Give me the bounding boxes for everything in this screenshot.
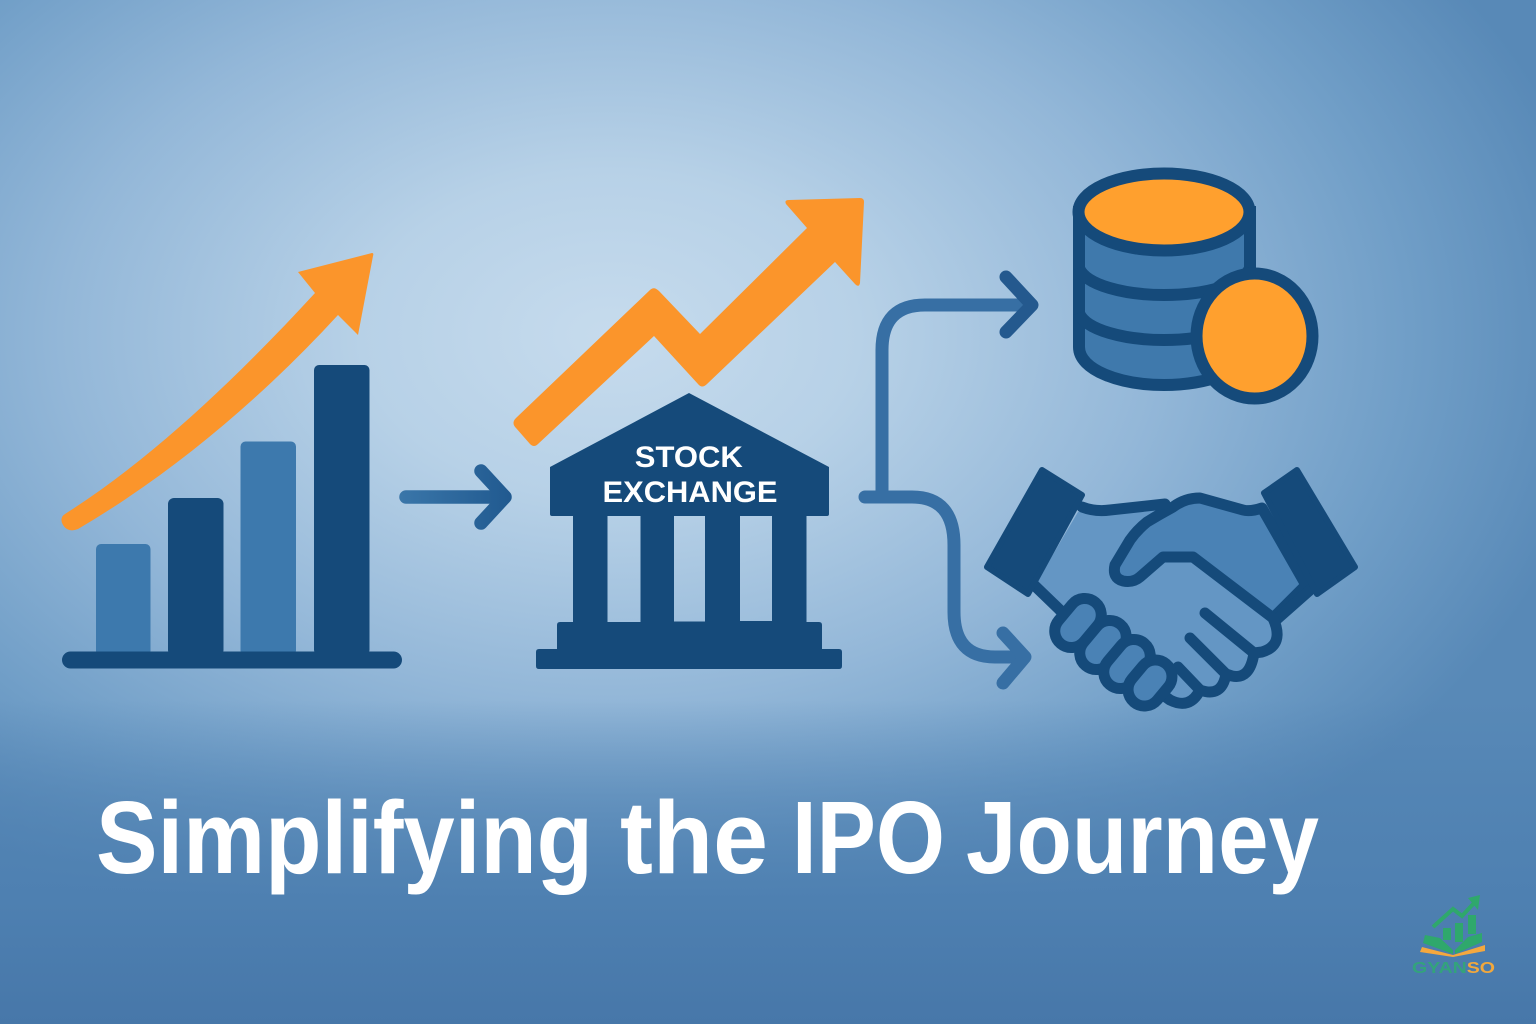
title: the: [620, 780, 768, 895]
right cuff: [1264, 470, 1355, 594]
knuckles: [1048, 592, 1179, 713]
bars: [62, 365, 402, 668]
icon: stock exchange building: [536, 393, 842, 669]
logo trend arrow: [1433, 895, 1480, 927]
arrow: chart to exchange: [406, 471, 505, 523]
arrow: branch to handshake: [865, 497, 1025, 683]
icon: orange growth arrow: [61, 253, 373, 530]
building label: EXCHANGE: [602, 476, 778, 509]
left hand: [1035, 504, 1275, 704]
coin: [1196, 274, 1312, 398]
title: Simplifying: [96, 780, 593, 895]
bar chart with rising arrow: [61, 253, 402, 668]
title: IPO: [792, 780, 945, 895]
right hand: [1114, 498, 1306, 618]
logo: Gyanso: [1412, 895, 1495, 977]
arrow: branch to coins: [882, 277, 1032, 497]
left cuff: [987, 470, 1082, 594]
icon: handshake: [987, 470, 1355, 713]
title: Journey: [966, 780, 1319, 895]
outlines and finger lines: [1034, 504, 1310, 703]
icon: database with coin: [1078, 174, 1312, 398]
logo chart bars: [1443, 915, 1476, 942]
icon: zigzag orange arrow: [514, 198, 864, 446]
building label: STOCK: [635, 441, 743, 474]
logo book: [1423, 933, 1482, 954]
logo wordmark: GYAN SO: [1412, 960, 1495, 977]
